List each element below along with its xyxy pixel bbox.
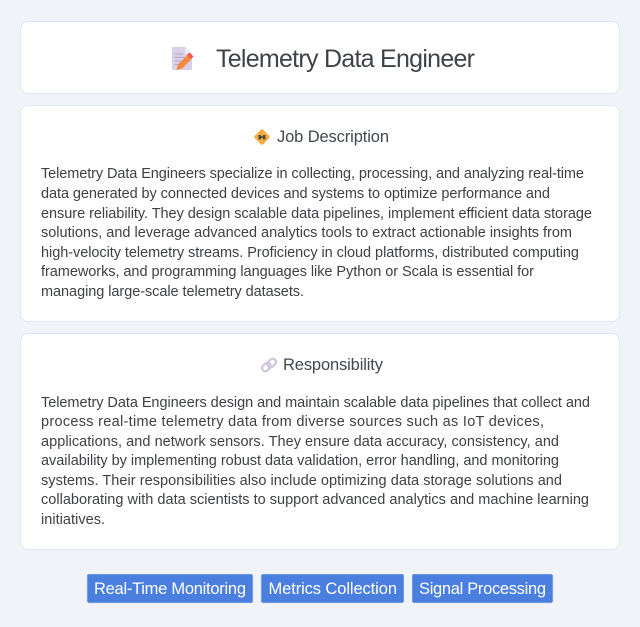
text block: job description: Telemetry Data Engineers specialize in collecting, processing, and analyzing real-time — [41, 166, 584, 182]
text block: responsibility: applications, and network sensors. They ensure data accuracy, consistency, and — [41, 434, 559, 450]
tag: real-time monitoring — [87, 574, 253, 603]
heading: job description: Job Description — [277, 128, 389, 146]
panel: job description — [20, 106, 620, 322]
panel: title — [20, 22, 620, 94]
tag: metrics collection: Metrics Collection — [268, 580, 397, 598]
title text: Telemetry Data Engineer — [216, 45, 475, 73]
tag: signal processing — [412, 574, 553, 603]
icon: chain link — [261, 357, 277, 373]
text block: responsibility: collaborating with data scientists to support advanced analytics and machine learning — [41, 492, 589, 508]
tag: real-time monitoring: Real-Time Monitoring — [94, 580, 246, 598]
text block: responsibility: Telemetry Data Engineers design and maintain scalable data pipelines that collect and — [41, 395, 590, 411]
icon: orange diamond — [254, 129, 270, 145]
text block: responsibility: process real-time telemetry data from diverse sources such as IoT devices, — [41, 414, 544, 430]
text block: responsibility: availability by implementing robust data validation, error handling, and monitoring — [41, 453, 559, 469]
text block: job description: solutions, and leverage advanced analytics tools to extract actionable insights from — [41, 225, 572, 241]
heading: responsibility: Responsibility — [283, 356, 384, 374]
text block: responsibility — [41, 395, 590, 528]
tag: signal processing: Signal Processing — [419, 580, 546, 598]
tag: metrics collection — [261, 574, 404, 603]
text block: job description: frameworks, and programming languages like Python or Scala is essential for — [41, 264, 534, 280]
icon: document with pencil — [172, 47, 194, 70]
text block: job description — [41, 166, 592, 300]
text block: job description: high-velocity telemetry streams. Proficiency in cloud platforms, distributed computing — [41, 245, 579, 261]
text block: responsibility: systems. Their responsibilities also include optimizing data storage solutions and — [41, 473, 562, 489]
text block: job description: ensure reliability. They design scalable data pipelines, implement efficient data storage — [41, 206, 592, 222]
panel: responsibility — [20, 334, 620, 550]
text block: responsibility: initiatives. — [41, 512, 105, 528]
text block: job description: managing large-scale telemetry datasets. — [41, 284, 304, 300]
text block: job description: data generated by connected devices and systems to optimize performance and — [41, 186, 550, 202]
